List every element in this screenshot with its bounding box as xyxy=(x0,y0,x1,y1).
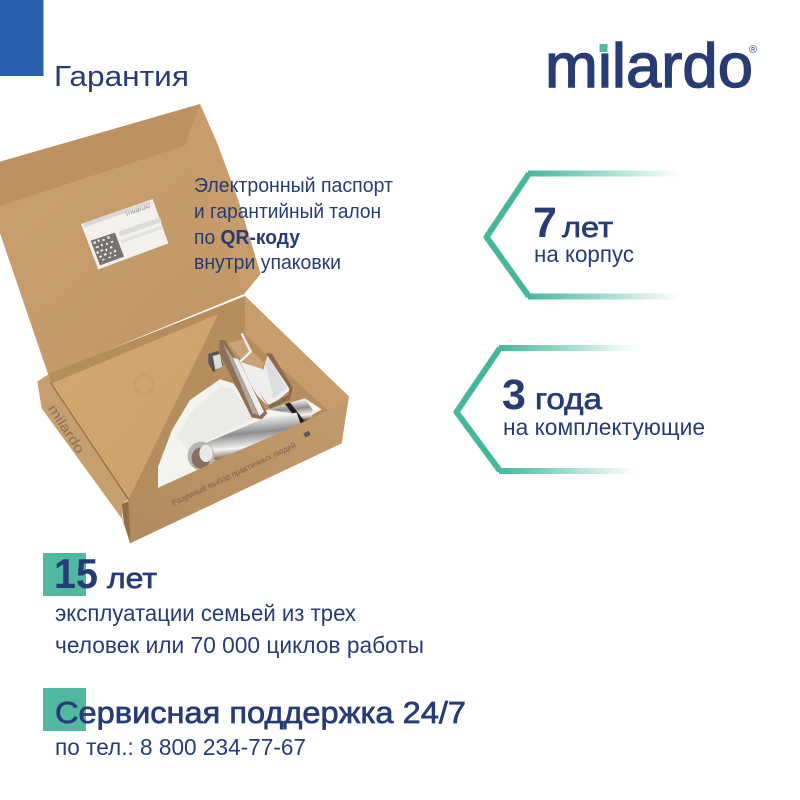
logo: milardo: ® xyxy=(749,44,757,56)
callout: 7 years: лет xyxy=(562,212,613,244)
block: 15 years: человек или 70 000 циклов работы xyxy=(55,632,424,658)
paper sticker with QR: milardo xyxy=(124,201,152,218)
text block: electronic passport xyxy=(194,174,394,274)
callout: 3 years: 3 xyxy=(502,371,526,419)
callout: 7 years: 7 xyxy=(533,199,557,247)
callout: 3 years: на комплектующие xyxy=(503,414,705,440)
block: service support: Сервисная поддержка 24/7 xyxy=(55,695,466,730)
block: 15 years xyxy=(43,550,424,658)
block: service support xyxy=(43,688,466,760)
spout mouth xyxy=(188,442,214,470)
callout: 7 years xyxy=(486,174,680,296)
block: 15 years: 15 xyxy=(54,550,98,597)
side print: milardo xyxy=(45,402,88,456)
second handle plate xyxy=(258,353,293,409)
block: 15 years: лет xyxy=(107,563,157,595)
logo: milardo: milardo xyxy=(545,32,753,101)
callout: 3 years: года xyxy=(535,383,602,416)
front print: Разумный выбор практичных людей xyxy=(170,440,298,508)
body base xyxy=(267,398,313,424)
inner triangle xyxy=(52,314,218,500)
text block: electronic passport: Электронный паспорт xyxy=(194,174,394,197)
front panel xyxy=(122,397,349,543)
block: 15 years: эксплуатации семьей из трех xyxy=(55,600,356,626)
photo: open cardboard box with faucet xyxy=(0,104,349,543)
text block: electronic passport: и гарантийный талон xyxy=(194,200,381,223)
long handle plate xyxy=(219,340,267,419)
knob xyxy=(208,351,223,372)
faucet and white bag xyxy=(158,333,322,490)
spout xyxy=(203,413,301,461)
paper sticker with QR xyxy=(81,199,168,269)
text block: electronic passport: по QR-коду xyxy=(194,226,301,249)
left side panel xyxy=(37,374,130,543)
callout: 7 years: на корпус xyxy=(534,241,634,267)
blue corner block xyxy=(0,0,44,76)
block: service support: по тел.: 8 800 234-77-67 xyxy=(55,734,306,760)
title: Гарантия xyxy=(54,61,189,93)
box shell xyxy=(0,104,349,502)
callout: 3 years xyxy=(456,348,705,471)
text block: electronic passport: внутри упаковки xyxy=(194,251,341,274)
